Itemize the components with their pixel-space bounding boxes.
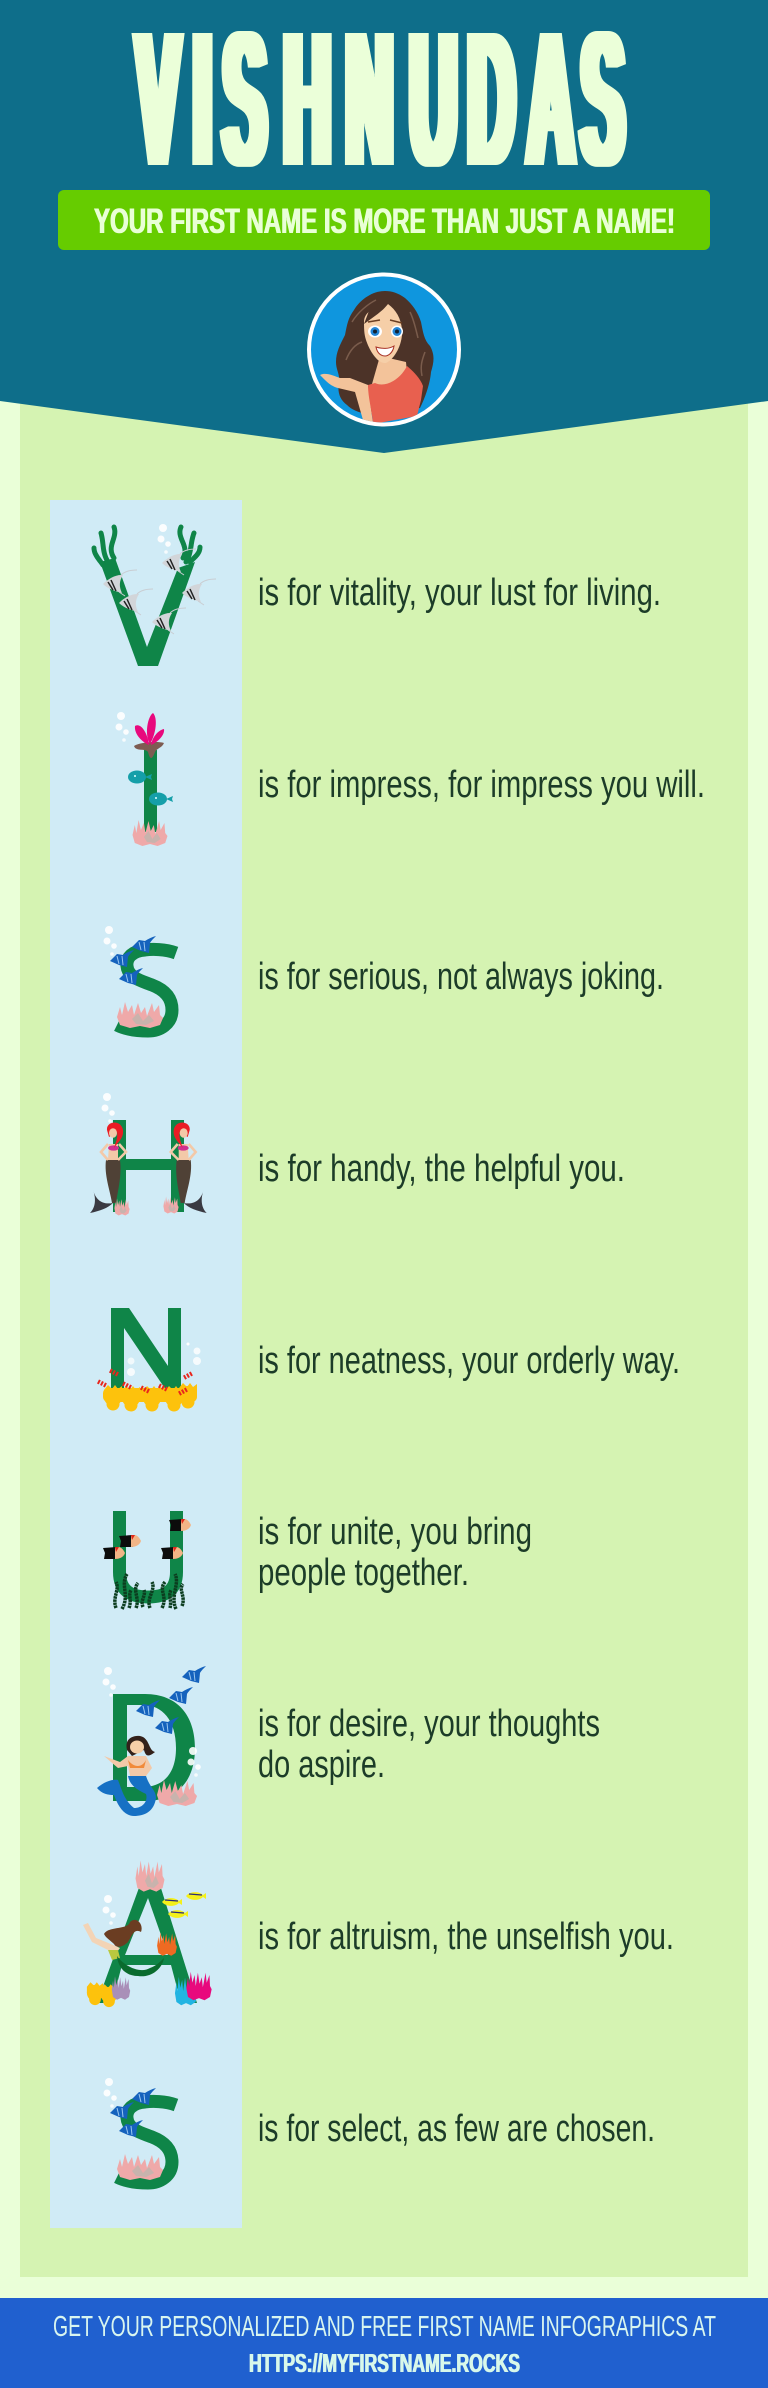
icon: letter S (104, 926, 176, 1031)
icon: letter N (98, 1308, 201, 1412)
icon: letter D (97, 1666, 206, 1816)
icon: woman avatar (309, 274, 459, 424)
footer (0, 2298, 768, 2388)
text: H line: is for handy, the helpful you. (258, 1148, 625, 1190)
icon: letter I (116, 712, 173, 846)
panel: letter column (50, 500, 242, 2228)
icon: letter U (103, 1511, 191, 1609)
icon: letter A (83, 1860, 212, 2007)
icon: letter S (final) (104, 2078, 176, 2183)
text: U lines: people together. (258, 1552, 469, 1594)
footer: HTTPS://MYFIRSTNAME.ROCKS (249, 2348, 520, 2378)
text: U lines: is for unite, you bring (258, 1511, 532, 1553)
icon: letter H (90, 1093, 207, 1215)
text: D lines: is for desire, your thoughts (258, 1703, 600, 1745)
panel: content background (20, 380, 748, 2277)
panel: teal header (0, 0, 768, 453)
banner (58, 190, 710, 250)
icon: letter V (94, 524, 216, 666)
text: V line: is for vitality, your lust for living. (258, 572, 661, 614)
text: D lines: do aspire. (258, 1744, 385, 1786)
